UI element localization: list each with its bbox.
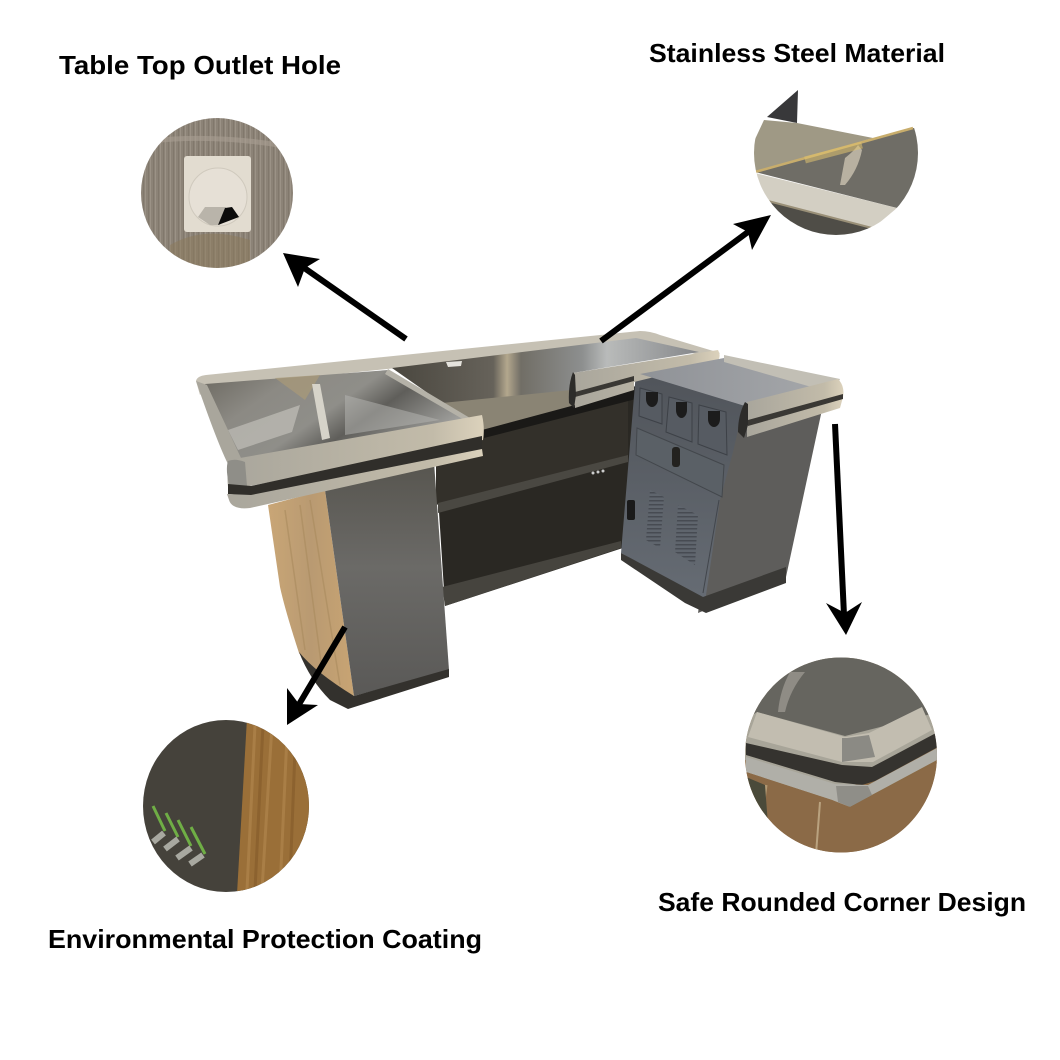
arrow: to table top outlet hole <box>283 253 406 339</box>
left pedestal base <box>299 652 449 709</box>
dark interior with shelves <box>436 380 640 606</box>
arrow: to safe rounded corner design <box>826 424 862 635</box>
heading: Table Top Outlet Hole: Table Top Outlet Hole <box>59 50 341 80</box>
heading: Stainless Steel Material: Stainless Steel Material <box>649 38 945 68</box>
left pedestal front <box>325 462 449 696</box>
product: checkout counter <box>196 331 843 709</box>
detail circle: environmental protection coating <box>140 718 312 894</box>
middle beige front strip <box>438 382 575 430</box>
icon: green and grey chevrons <box>153 806 205 864</box>
detail circle: stainless steel material <box>750 90 925 240</box>
left steel tray <box>196 369 470 466</box>
worktop back rail <box>196 331 720 395</box>
arrow: to stainless steel material <box>601 215 771 341</box>
wood end panel <box>268 490 354 696</box>
right cabinet base <box>621 553 786 613</box>
right rail with end cap <box>738 379 843 438</box>
outlet hole on worktop <box>446 361 462 367</box>
left front rail <box>227 415 484 508</box>
cabinet drawers <box>627 388 727 593</box>
heading: Safe Rounded Corner Design: Safe Rounded Corner Design <box>658 887 1026 917</box>
detail circle: table top outlet hole <box>140 117 295 270</box>
middle rail with end cap <box>569 350 720 408</box>
arrow: to environmental protection coating <box>287 627 345 725</box>
right steel top <box>640 358 825 406</box>
right cabinet door face <box>621 372 745 602</box>
detail circle: safe rounded corner design <box>745 657 939 854</box>
heading: Environmental Protection Coating: Environmental Protection Coating <box>48 924 482 954</box>
middle steel surface <box>392 338 699 403</box>
right cabinet side <box>698 405 823 613</box>
